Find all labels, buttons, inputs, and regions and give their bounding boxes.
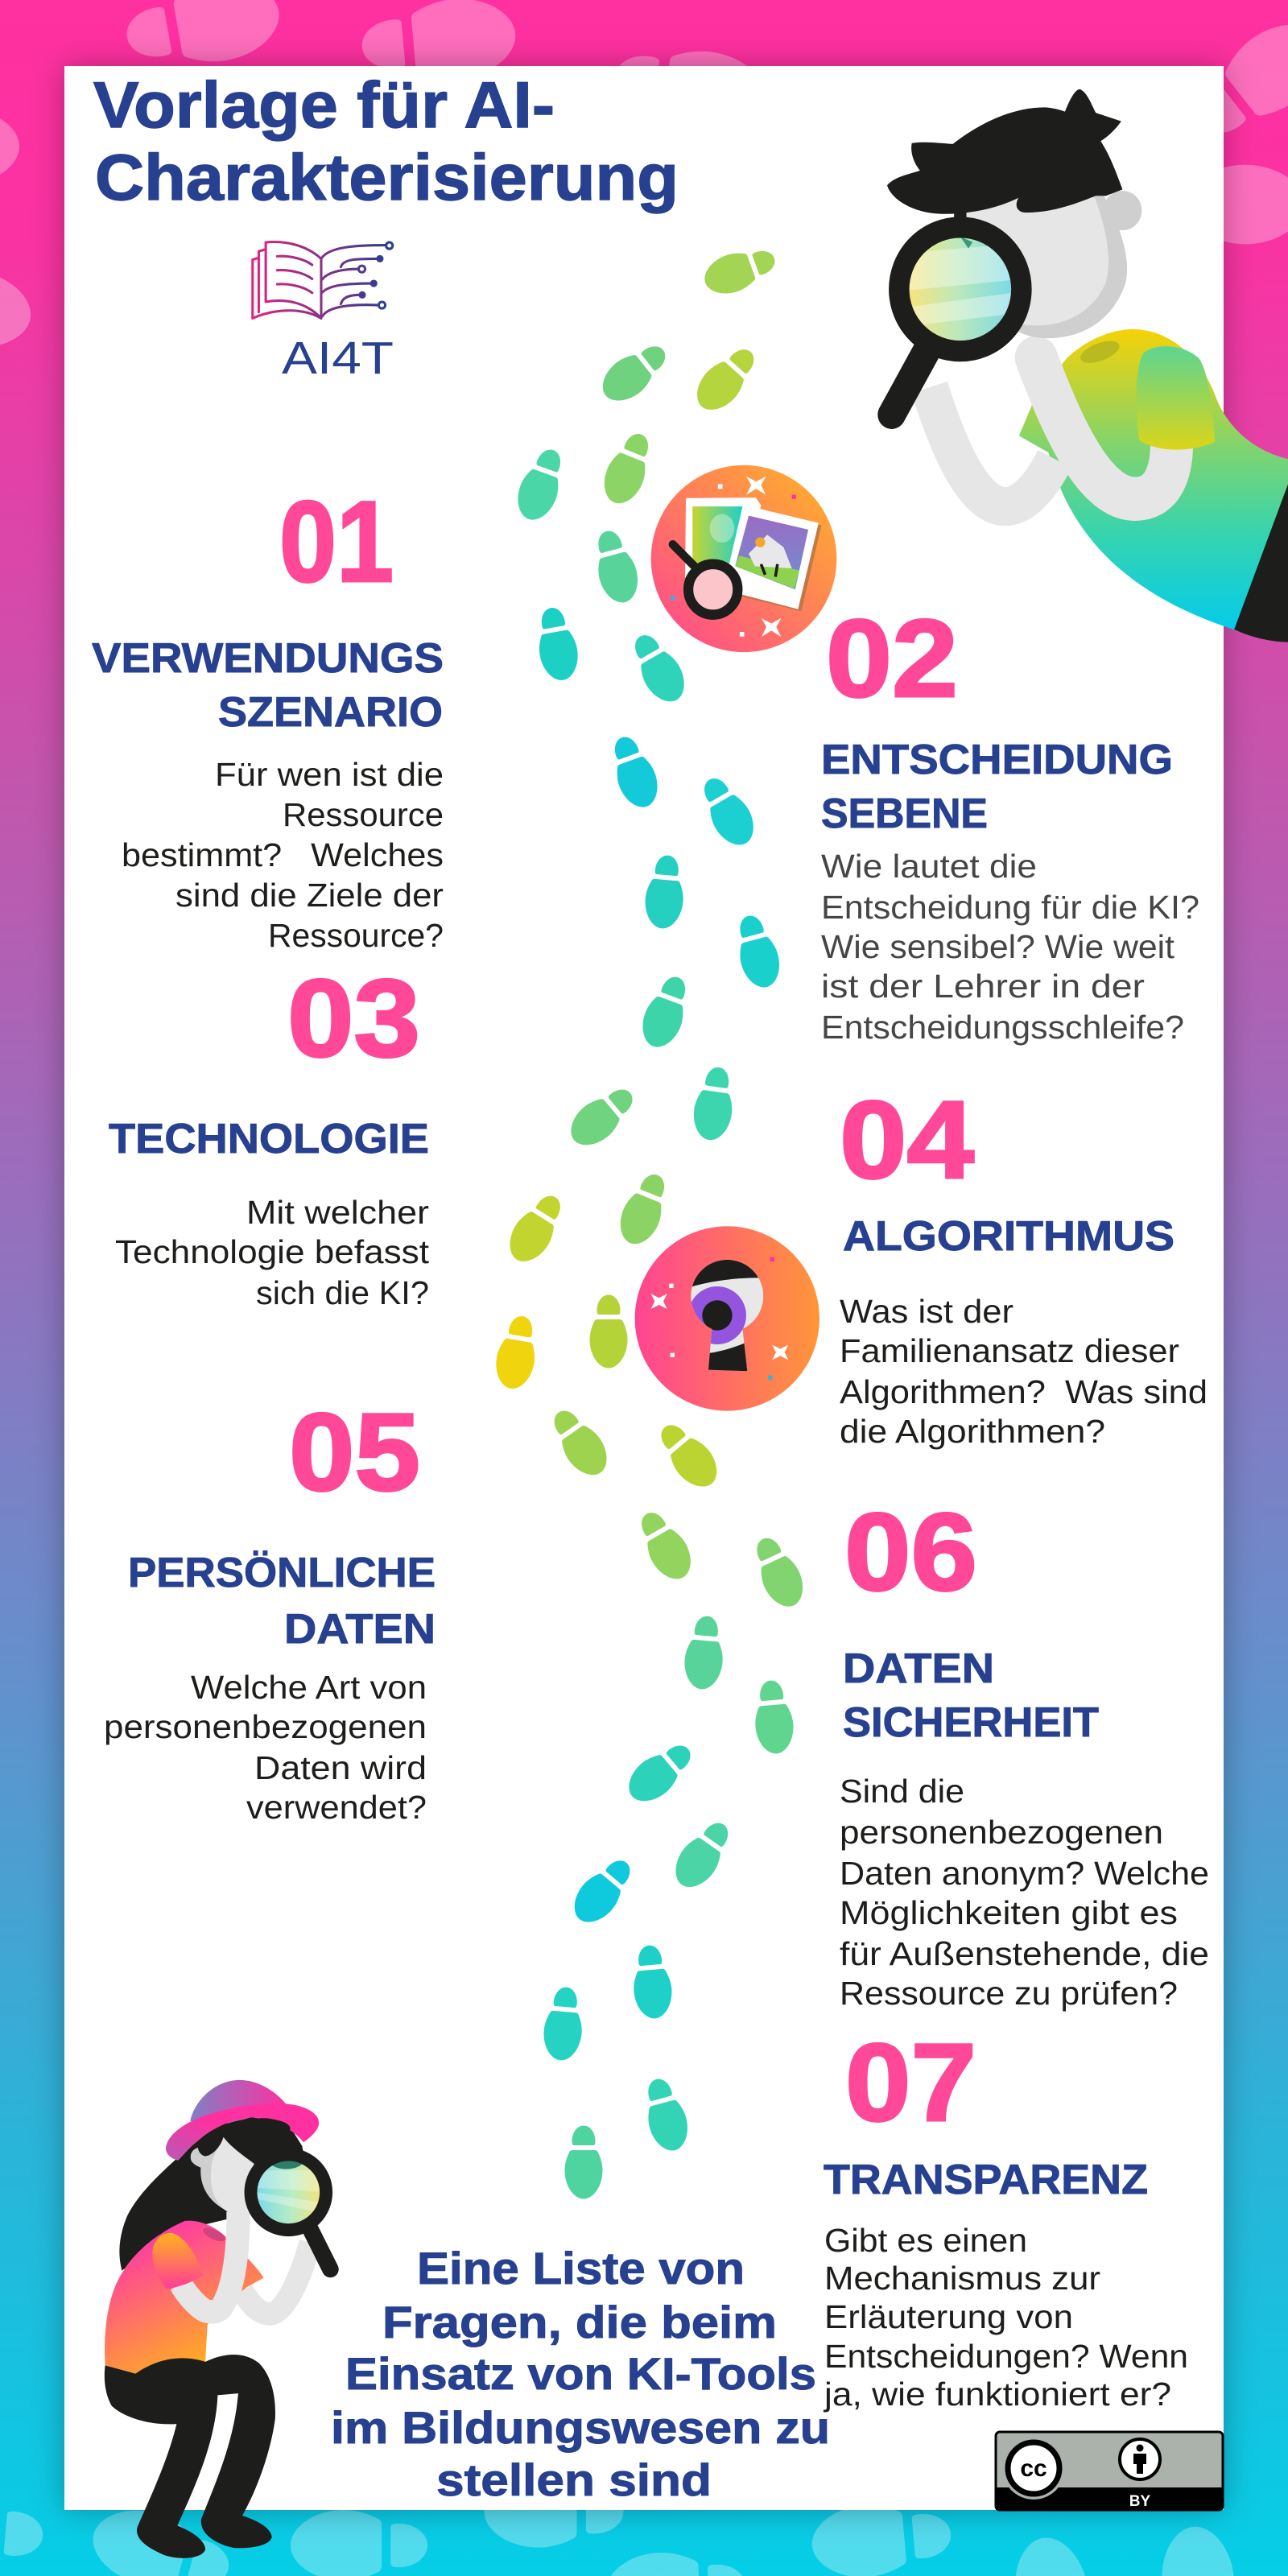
body 01: Ressource xyxy=(283,796,444,833)
body 02: Wie lautet die xyxy=(821,848,1037,885)
small magnifier xyxy=(673,544,737,615)
body 06: Ressource zu prüfen? xyxy=(840,1975,1178,2012)
icon: attribution person xyxy=(1120,2439,1160,2479)
icon: open book with circuit lines xyxy=(253,242,393,318)
body 06: personenbezogenen xyxy=(840,1814,1163,1851)
number 02: 02 xyxy=(826,597,958,720)
icon: eye behind keyhole xyxy=(635,1226,819,1411)
body 05 xyxy=(104,1669,427,1826)
icon: photos under a magnifier xyxy=(651,465,836,652)
logo wordmark: AI4T xyxy=(282,332,394,384)
closing statement: im Bildungswesen zu xyxy=(331,2402,830,2453)
illustration: person with magnifier, top right xyxy=(887,89,1288,642)
body 02: ist der Lehrer in der xyxy=(821,968,1145,1005)
icon: cc xyxy=(1002,2437,1065,2500)
keyhole with eye xyxy=(691,1260,763,1372)
heading 01: SZENARIO xyxy=(218,689,443,736)
heading 02: SEBENE xyxy=(821,791,988,837)
closing statement: Einsatz von KI-Tools xyxy=(345,2348,816,2399)
body 06: Möglichkeiten gibt es xyxy=(840,1894,1178,1931)
body 05: Daten wird xyxy=(254,1749,427,1786)
body 07: ja, wie funktioniert er? xyxy=(824,2376,1171,2413)
number 07: 07 xyxy=(845,2021,976,2145)
body 06: für Außenstehende, die xyxy=(840,1935,1209,1972)
body 06: Sind die xyxy=(840,1773,964,1810)
closing statement: Fragen, die beim xyxy=(382,2297,777,2347)
title: Charakterisierung xyxy=(95,142,679,214)
body 02 xyxy=(821,848,1199,1046)
body 01 xyxy=(122,756,444,954)
body 05: personenbezogenen xyxy=(104,1708,427,1745)
CC BY licence badge xyxy=(996,2432,1223,2510)
body 01: Für wen ist die xyxy=(215,756,444,793)
body 07 xyxy=(824,2222,1188,2413)
heading 02 xyxy=(821,737,1173,837)
back photo xyxy=(685,497,761,581)
body 01: sind die Ziele der xyxy=(175,877,444,914)
body 05: verwendet? xyxy=(246,1789,427,1826)
illustration: person with hat and magnifier, bottom left xyxy=(105,2080,330,2558)
body 02: Wie sensibel? Wie weit xyxy=(821,928,1175,965)
body 04 xyxy=(840,1293,1208,1450)
number 06: 06 xyxy=(844,1491,977,1614)
body 07: Erläuterung von xyxy=(824,2298,1073,2335)
closing statement xyxy=(331,2243,830,2505)
body 06: Daten anonym? Welche xyxy=(840,1855,1209,1892)
body 07: Mechanismus zur xyxy=(824,2260,1100,2297)
body 03: sich die KI? xyxy=(256,1274,429,1311)
heading 05: PERSÖNLICHE xyxy=(128,1550,436,1596)
body 04: die Algorithmen? xyxy=(840,1413,1105,1450)
body 03: Mit welcher xyxy=(246,1194,429,1231)
section 06 xyxy=(840,1491,1209,2012)
heading 01 xyxy=(92,635,444,736)
heading 05 xyxy=(128,1550,436,1653)
body 07: Entscheidungen? Wenn xyxy=(824,2338,1188,2375)
section 05 xyxy=(104,1391,436,1826)
heading 03: TECHNOLOGIE xyxy=(109,1116,429,1162)
title xyxy=(93,69,679,214)
sparkles xyxy=(671,480,796,637)
heading 02: ENTSCHEIDUNG xyxy=(821,737,1173,783)
number 05: 05 xyxy=(289,1391,420,1514)
body 04: Algorithmen? Was sind xyxy=(840,1373,1208,1410)
front photo xyxy=(730,506,821,611)
body 02: Entscheidungsschleife? xyxy=(821,1009,1184,1046)
section 01 xyxy=(92,478,444,954)
body 01: Ressource? xyxy=(268,917,444,954)
body 02: Entscheidung für die KI? xyxy=(821,889,1199,926)
heading 07: TRANSPARENZ xyxy=(824,2157,1148,2203)
label: BY: BY xyxy=(1129,2493,1151,2510)
number 04: 04 xyxy=(840,1079,974,1202)
heading 06 xyxy=(843,1645,1099,1746)
heading 05: DATEN xyxy=(284,1606,436,1653)
heading 06: DATEN xyxy=(843,1645,994,1692)
body 04: Was ist der xyxy=(840,1293,1013,1330)
body 01: bestimmt? Welches xyxy=(122,836,444,873)
body 03 xyxy=(115,1194,430,1311)
section 02 xyxy=(821,597,1199,1046)
heading 04: ALGORITHMUS xyxy=(843,1213,1174,1260)
closing statement: stellen sind xyxy=(436,2454,712,2505)
heading 06: SICHERHEIT xyxy=(843,1699,1099,1746)
body 03: Technologie befasst xyxy=(115,1233,430,1270)
icon: cc: cc xyxy=(1020,2455,1047,2482)
footprint trail xyxy=(492,240,811,2199)
sparkles xyxy=(654,1257,786,1380)
AI4T logo xyxy=(253,242,394,384)
body 04: Familienansatz dieser xyxy=(840,1332,1179,1369)
number 03: 03 xyxy=(287,957,420,1080)
number 01: 01 xyxy=(279,478,394,606)
section 07 xyxy=(824,2021,1188,2413)
body 05: Welche Art von xyxy=(191,1669,427,1706)
section 04 xyxy=(840,1079,1208,1450)
body 07: Gibt es einen xyxy=(824,2222,1027,2259)
closing statement: Eine Liste von xyxy=(417,2243,745,2293)
section 03 xyxy=(109,957,430,1311)
body 06 xyxy=(840,1773,1209,2012)
heading 01: VERWENDUNGS xyxy=(92,635,444,682)
title: Vorlage für AI- xyxy=(93,69,555,142)
